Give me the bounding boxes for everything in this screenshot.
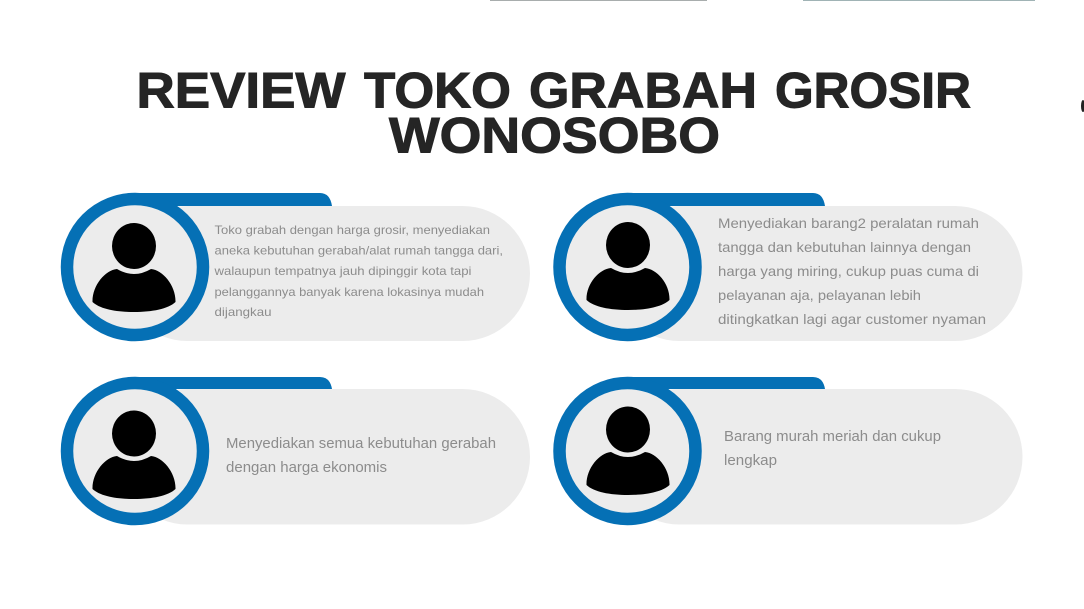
review text 2: harga yang miring, cukup puas cuma di [718, 263, 979, 279]
review text 1: dijangkau [214, 305, 272, 319]
review text 3: Menyediakan semua kebutuhan gerabah [226, 436, 496, 452]
review text 1 [213, 223, 503, 319]
review text 1: Toko grabah dengan harga grosir, menyediakan [214, 223, 490, 237]
review text 2: ditingkatkan lagi agar customer nyaman [718, 311, 986, 327]
icon: person 1 [92, 223, 176, 312]
icon: person 2 [586, 222, 670, 310]
review text 2 [718, 215, 986, 327]
pill background: review 1 [120, 206, 530, 341]
review text 2: Menyediakan barang2 peralatan rumah [718, 215, 979, 231]
pill background: review 3 [120, 389, 530, 524]
panel: review 3 [67, 377, 530, 524]
avatar ring: review 2 [560, 199, 696, 335]
review text 4 [724, 429, 941, 469]
review text 1: pelanggannya banyak karena lokasinya mudah [214, 285, 484, 299]
title [136, 62, 971, 164]
review text 1: walaupun tempatnya jauh dipinggir kota tapi [213, 264, 471, 278]
tab bar: review 3 [135, 377, 332, 389]
review text 4: lengkap [724, 453, 777, 469]
title: WONOSOBO [389, 108, 720, 164]
review text 2: tangga dan kebutuhan lainnya dengan [718, 239, 971, 255]
title: REVIEW [136, 62, 346, 118]
tab bar: review 1 [135, 193, 332, 206]
panel: review 1 [67, 193, 530, 341]
icon: person 3 [92, 410, 176, 499]
review text 1: aneka kebutuhan gerabah/alat rumah tangga dari, [214, 244, 503, 258]
icon: person 4 [586, 406, 670, 495]
title: GROSIR [775, 62, 971, 118]
panel: review 4 [560, 377, 1022, 524]
avatar ring: review 1 [67, 199, 203, 335]
tab bar: review 2 [627, 193, 825, 206]
title: TOKO [364, 62, 511, 118]
review text 4: Barang murah meriah dan cukup [724, 429, 941, 445]
review text 3 [226, 436, 496, 476]
pill background: review 4 [612, 389, 1022, 524]
review text 3: dengan harga ekonomis [226, 460, 387, 476]
avatar ring: review 4 [560, 383, 696, 519]
tab bar: review 4 [627, 377, 825, 389]
title: GRABAH [529, 62, 757, 118]
avatar ring: review 3 [67, 383, 203, 519]
review text 2: pelayanan aja, pelayanan lebih [718, 287, 921, 303]
pill background: review 2 [612, 206, 1022, 341]
panel: review 2 [560, 193, 1022, 341]
